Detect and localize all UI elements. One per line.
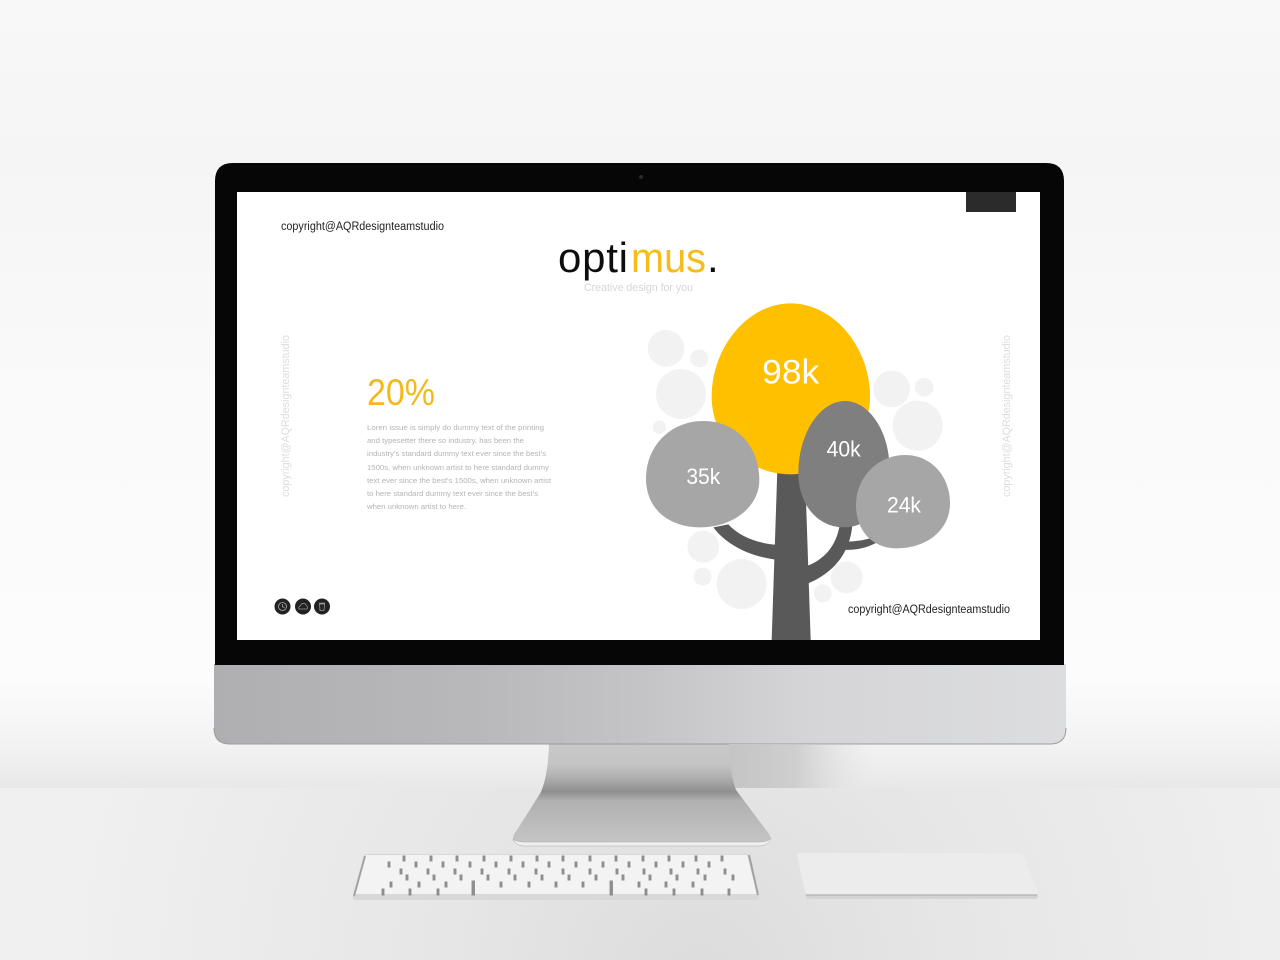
blob: 24k xyxy=(856,455,950,548)
tree chart xyxy=(646,303,950,640)
blob: 98k yellow xyxy=(712,303,870,474)
vertical copyright left: copyright@AQRdesignteamstudio xyxy=(280,335,292,497)
key gaps xyxy=(382,856,734,895)
body text: industry's standard dummy text ever since the best's xyxy=(367,449,546,458)
icon: clock xyxy=(274,598,290,614)
copyright bottom right: copyright@AQRdesignteamstudio xyxy=(848,604,1010,616)
tree trunk and branches xyxy=(713,470,878,640)
desk surface xyxy=(0,788,1280,960)
title: . xyxy=(707,234,719,281)
screen slide xyxy=(237,192,1040,640)
blob: 40k: 40k xyxy=(827,437,862,462)
keyboard xyxy=(353,854,759,900)
monitor bezel xyxy=(215,163,1064,665)
body text: text ever since the best's 1500s, when unknown artist xyxy=(367,476,551,485)
blob: 35k: 35k xyxy=(686,464,721,489)
body text: 1500s, when unknown artist to here standard dummy xyxy=(367,463,549,472)
body text: Loren issue is simply do dummy text of the printing xyxy=(367,423,544,432)
blob: 40k xyxy=(798,401,889,527)
icon: trash can xyxy=(314,598,330,614)
keyboard edges xyxy=(354,855,758,896)
vertical copyright right: copyright@AQRdesignteamstudio xyxy=(1001,335,1013,497)
percentage figure: 20% xyxy=(367,372,435,413)
copyright top left: copyright@AQRdesignteamstudio xyxy=(281,221,444,233)
body text xyxy=(366,423,551,511)
title: opti xyxy=(558,234,628,281)
blob: 24k: 24k xyxy=(887,492,922,517)
blob: 98k yellow: 98k xyxy=(762,353,820,391)
title: mus xyxy=(631,234,706,281)
corner tab xyxy=(966,192,1016,212)
webcam xyxy=(639,175,643,179)
trackpad xyxy=(797,853,1038,899)
blob: 35k xyxy=(646,421,759,527)
body text: to here standard dummy text ever since the best's xyxy=(367,489,538,498)
monitor stand xyxy=(513,744,771,846)
body text: and typesetter there so industry. has been the xyxy=(367,436,524,445)
chin bottom edge xyxy=(214,728,1066,744)
icon row xyxy=(274,598,330,614)
background bubbles xyxy=(648,330,943,609)
title xyxy=(558,234,719,281)
subtitle: Creative design for you xyxy=(584,282,693,294)
stand shadow on wall xyxy=(729,745,879,788)
monitor chin xyxy=(214,664,1066,744)
keys xyxy=(355,855,757,894)
icon: cloud xyxy=(295,598,311,614)
body text: when unknown artist to here. xyxy=(366,502,466,511)
